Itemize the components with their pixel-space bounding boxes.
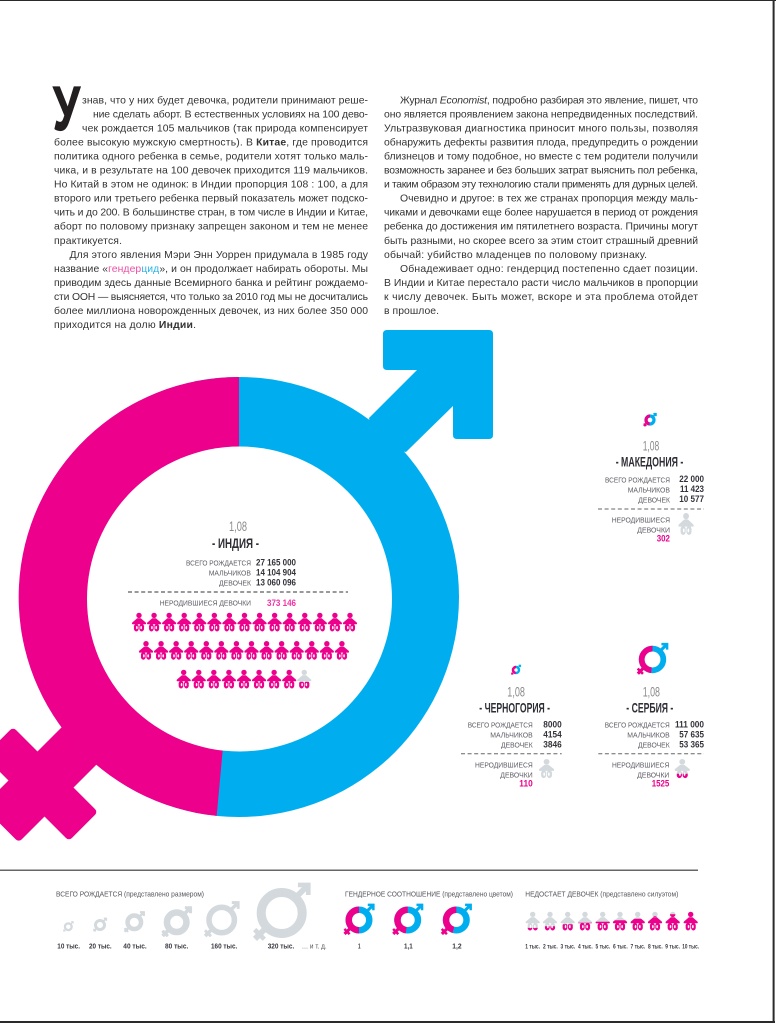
baby icons row 1 [132, 613, 357, 631]
ratio: 1,08 [229, 519, 247, 534]
drop cap: У [53, 75, 81, 144]
article text: left column: Но Китай в этом не одинок: в Индии пропорция 108 : 100, а для [54, 180, 368, 191]
baby icons row 2 [139, 641, 349, 660]
article text: right column: и таким образом эту технологию стали применять для дурных целей. [384, 179, 698, 191]
article text: left column: приводим здесь данные Всемирного банка и рейтинг рождаемо- [54, 277, 368, 289]
size labels: … и т. д. [302, 942, 327, 951]
missing girls: ДЕВОЧКИ [637, 770, 669, 779]
baby icons row 3 [177, 670, 311, 688]
statistics: ДЕВОЧЕК [638, 495, 671, 504]
size labels: 40 тыс. [123, 942, 147, 951]
article text: left column: Для этого явления Мэри Энн Уоррен придумала в 1985 году [70, 250, 369, 261]
statistics: 53 365 [679, 740, 705, 750]
article text: right column: обнаружить дефекты развития плода, предупредить о рождении [384, 136, 698, 148]
statistics: ВСЕГО РОЖДАЕТСЯ [186, 559, 251, 568]
legend: gender ratio [342, 890, 513, 951]
article text: right column: ребенка до достижения им пятилетнего возраста. Причины могут [384, 221, 698, 233]
article text: left column: политика одного ребенка в семье, родители хотят только маль- [54, 150, 368, 162]
article text: left column: более миллиона новорожденных девочек, из них более 350 000 [54, 305, 368, 317]
silhouette labels: 6 тыс. [613, 944, 628, 951]
ratio: 1,08 [507, 685, 525, 700]
blue half of ring [19, 377, 459, 817]
statistics: 22 000 [679, 474, 704, 485]
missing girls: 302 [657, 534, 670, 545]
country name: - ЧЕРНОГОРИЯ - [479, 700, 550, 716]
panel: Macedonia [598, 413, 704, 545]
ratio labels [358, 942, 462, 951]
article text: right column: близнецов и тому подобное, но вместе с тем родители получили [384, 150, 698, 162]
statistics: ВСЕГО РОЖДАЕТСЯ [605, 721, 670, 730]
legend divider [0, 870, 698, 871]
statistics: 3846 [543, 740, 562, 750]
missing girls: ДЕВОЧКИ [500, 770, 533, 779]
ratio icons [342, 904, 472, 937]
country name: - МАКЕДОНИЯ - [616, 454, 684, 470]
silhouette labels: 7 тыс. [630, 944, 645, 951]
article text: left column: ние сделать аборт. В естественных условиях на 100 дево- [93, 108, 368, 120]
silhouette labels [525, 944, 699, 951]
statistics [605, 474, 704, 505]
ratio labels: 1,2 [452, 942, 462, 951]
statistics: МАЛЬЧИКОВ [490, 731, 533, 740]
article text: right column: Очевидно и другое: в тех же странах пропорция между маль- [400, 194, 698, 205]
icon: baby [678, 513, 694, 535]
article text: right column: оно является проявлением закона непредвиденных последствий. [384, 109, 698, 120]
ratio: 1,08 [643, 439, 659, 454]
missing girls [612, 760, 670, 790]
pink half of ring [19, 377, 239, 816]
missing girls [612, 515, 670, 545]
missing girls: НЕРОДИВШИЕСЯ [612, 515, 670, 524]
ratio labels: 1,1 [404, 942, 413, 951]
article text: left column: сти ООН — выясняется, что только за 2010 год мы не досчитались [54, 292, 368, 303]
statistics [605, 720, 705, 750]
statistics: 57 635 [679, 730, 705, 740]
icon: gender symbol [643, 413, 656, 427]
country name: - ИНДИЯ - [212, 535, 259, 551]
article text: right column [384, 94, 698, 317]
panel: Montenegro [461, 665, 562, 790]
article text: right column: Ультразвуковая диагностика приносит много пользы, позволяя [384, 123, 698, 134]
ratio: 1,08 [643, 685, 660, 700]
ring hole [87, 446, 392, 752]
article text: right column: к числу девочек. Быть может, вскоре и эта проблема отойдет [384, 291, 698, 303]
article text: right column: В Индии и Китае перестало расти число мальчиков в пропорции [384, 278, 698, 289]
icon: baby [675, 759, 690, 778]
statistics [186, 558, 297, 588]
article text: right column: быть разными, но скорее всего за этим стоит страшный древний [384, 235, 698, 247]
missing girls: ДЕВОЧКИ [637, 525, 670, 534]
silhouette labels: 4 тыс. [578, 944, 593, 951]
statistics: 27 165 000 [256, 558, 296, 569]
missing girls: 110 [519, 779, 533, 790]
silhouette labels: 5 тыс. [596, 944, 610, 951]
missing girls: 1525 [652, 779, 670, 790]
article text: left column: чика, и в результате на 100 девочек приходится 119 мальчиков. [54, 166, 368, 176]
size labels: 160 тыс. [211, 942, 237, 951]
missing girls: 373 146 [267, 598, 296, 609]
silhouette icons [526, 912, 698, 930]
ratio labels: 1 [358, 942, 361, 951]
article text: left column: практикуется. [54, 236, 122, 247]
statistics: 8000 [543, 720, 562, 730]
silhouette labels: 3 тыс. [560, 944, 575, 951]
size icons [63, 883, 311, 944]
panel: Serbia [598, 643, 705, 790]
statistics: МАЛЬЧИКОВ [209, 568, 251, 577]
statistics: МАЛЬЧИКОВ [628, 485, 670, 494]
statistics: 13 060 096 [256, 578, 296, 588]
statistics: 11 423 [680, 484, 704, 495]
article text: left column: чек рождается 105 мальчиков (так природа компенсирует [82, 123, 368, 134]
article text: left column [53, 75, 369, 331]
statistics: 111 000 [675, 720, 704, 730]
missing girls [160, 598, 296, 609]
legend heading: ГЕНДЕРНОЕ СООТНОШЕНИЕ (представлено цветом) [345, 890, 513, 899]
silhouette labels: 2 тыс. [543, 944, 558, 951]
icon: baby [539, 759, 554, 778]
icon: gender symbol [511, 665, 521, 675]
panel: India [128, 519, 357, 688]
legend heading: ВСЕГО РОЖДАЕТСЯ (представлено размером) [56, 890, 204, 899]
size labels: 20 тыс. [89, 942, 112, 951]
silhouette labels: 8 тыс. [648, 944, 663, 951]
article text: left column: более высокую мужскую смертность). В Китае, где проводится [54, 136, 368, 148]
male arrow [369, 330, 493, 452]
article text: left column: приходится на долю Индии. [54, 320, 196, 331]
silhouette labels: 9 тыс. [665, 944, 680, 951]
missing girls [475, 760, 533, 790]
missing girls: НЕРОДИВШИЕСЯ [475, 760, 533, 769]
size labels: 80 тыс. [165, 942, 188, 951]
size labels: 320 тыс. [268, 942, 294, 951]
legend: missing girls [525, 890, 699, 951]
statistics [468, 720, 562, 750]
size labels [57, 942, 327, 951]
statistics: ДЕВОЧЕК [501, 741, 533, 750]
article text: right column: возможность заранее и без больших затрат выяснить пол ребенка, [384, 164, 698, 176]
statistics: 4154 [543, 730, 562, 740]
silhouette labels: 10 тыс. [682, 944, 699, 951]
article text: right column: Журнал Economist, подробно разбирая это явление, пишет, что [400, 94, 698, 106]
article text: right column: чиками и девочками еще более нарушается в период от рождения [384, 207, 698, 219]
icon: gender symbol [635, 643, 668, 676]
statistics: 10 577 [679, 494, 704, 505]
statistics: 14 104 904 [256, 568, 297, 579]
female cross [0, 650, 175, 867]
large gender symbol: India [0, 330, 493, 867]
article text: right column: Обнадеживает одно: гендерцид постепенно сдает позиции. [400, 263, 698, 275]
statistics: ВСЕГО РОЖДАЕТСЯ [605, 475, 670, 484]
statistics: ВСЕГО РОЖДАЕТСЯ [468, 721, 533, 730]
legend: size [56, 883, 327, 951]
missing girls: НЕРОДИВШИЕСЯ ДЕВОЧКИ [160, 599, 251, 608]
country name: - СЕРБИЯ - [626, 700, 674, 716]
article text: right column: в прошлое. [384, 306, 439, 317]
statistics: ДЕВОЧЕК [219, 578, 252, 587]
article text: left column: аборт по половому признаку запрещен законом и тем не менее [54, 221, 368, 233]
statistics: МАЛЬЧИКОВ [627, 731, 670, 740]
article text: left column: название «гендерцид», и он продолжает набирать обороты. Мы [54, 263, 368, 275]
article text: left column: второго или третьего ребенка первый показатель может подско- [54, 193, 368, 205]
statistics: ДЕВОЧЕК [638, 741, 670, 750]
article text: left column: чить и до 200. В большинстве стран, в том числе в Индии и Китае, [54, 207, 368, 219]
legend heading: НЕДОСТАЕТ ДЕВОЧЕК (представлено силуэтом) [525, 890, 678, 899]
article text: right column: обычай: убийство младенцев по половому признаку. [384, 249, 647, 261]
article text: left column: знав, что у них будет девочка, родители принимают реше- [82, 94, 368, 106]
size labels: 10 тыс. [57, 942, 80, 951]
missing girls: НЕРОДИВШИЕСЯ [612, 760, 669, 769]
silhouette labels: 1 тыс. [525, 944, 540, 951]
